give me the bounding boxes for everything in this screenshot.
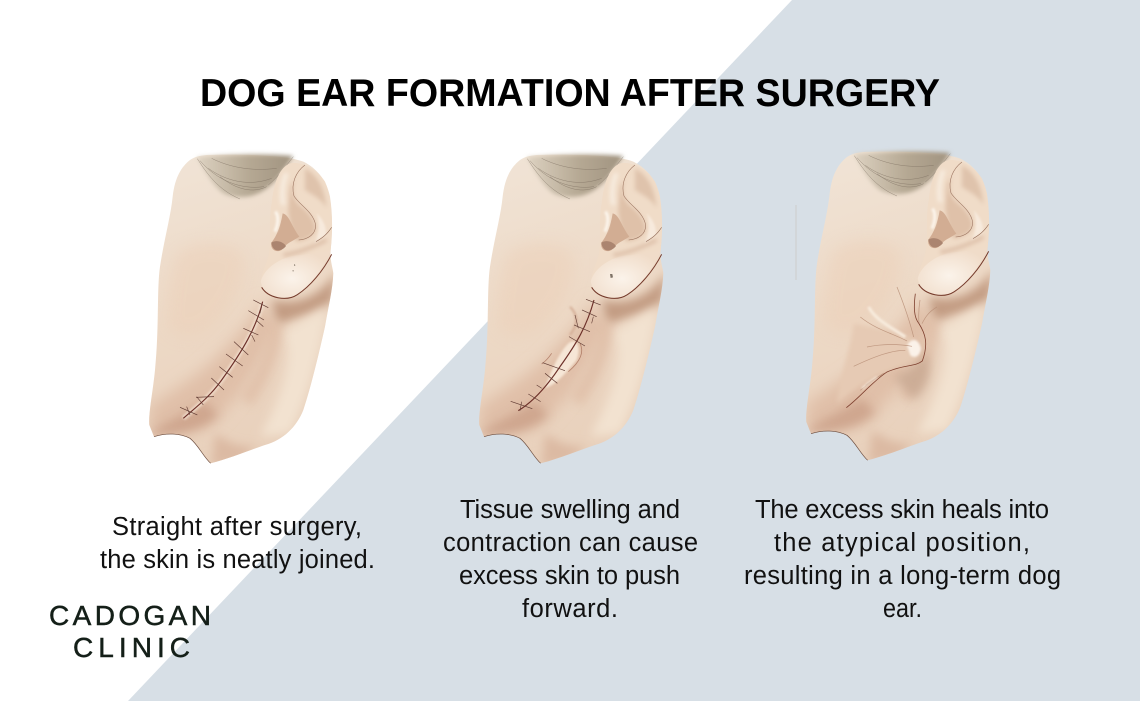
- caption 3: [744, 496, 1061, 623]
- caption 3: ear.: [883, 595, 922, 623]
- stray mark: [795, 205, 797, 280]
- caption 3: resulting in a long-term dog: [744, 562, 1061, 590]
- caption 1: [100, 513, 375, 574]
- caption 2: excess skin to push: [459, 562, 680, 590]
- logo: Cadogan Clinic: CADOGAN: [49, 600, 211, 631]
- caption 3: the atypical position,: [774, 529, 1030, 557]
- caption 3: The excess skin heals into: [755, 496, 1049, 524]
- dog ear fold: [837, 287, 937, 408]
- caption 2: forward.: [522, 595, 618, 623]
- caption 1: the skin is neatly joined.: [100, 546, 375, 574]
- sutures: [180, 264, 295, 418]
- caption 1: Straight after surgery,: [112, 513, 362, 541]
- illustration: swelling pushes skin forward: [479, 154, 667, 467]
- logo: Cadogan Clinic: CLINIC: [73, 632, 190, 663]
- caption 2: Tissue swelling and: [460, 496, 680, 524]
- illustration: long-term dog ear fold: [806, 151, 994, 464]
- title: DOG EAR FORMATION AFTER SURGERY: [200, 72, 940, 115]
- sutures: [511, 299, 601, 411]
- illustration: fresh straight sutures: [149, 154, 337, 467]
- caption 2: [443, 496, 698, 623]
- logo: Cadogan Clinic: [49, 600, 211, 663]
- swollen tissue: [542, 274, 613, 388]
- caption 2: contraction can cause: [443, 529, 698, 557]
